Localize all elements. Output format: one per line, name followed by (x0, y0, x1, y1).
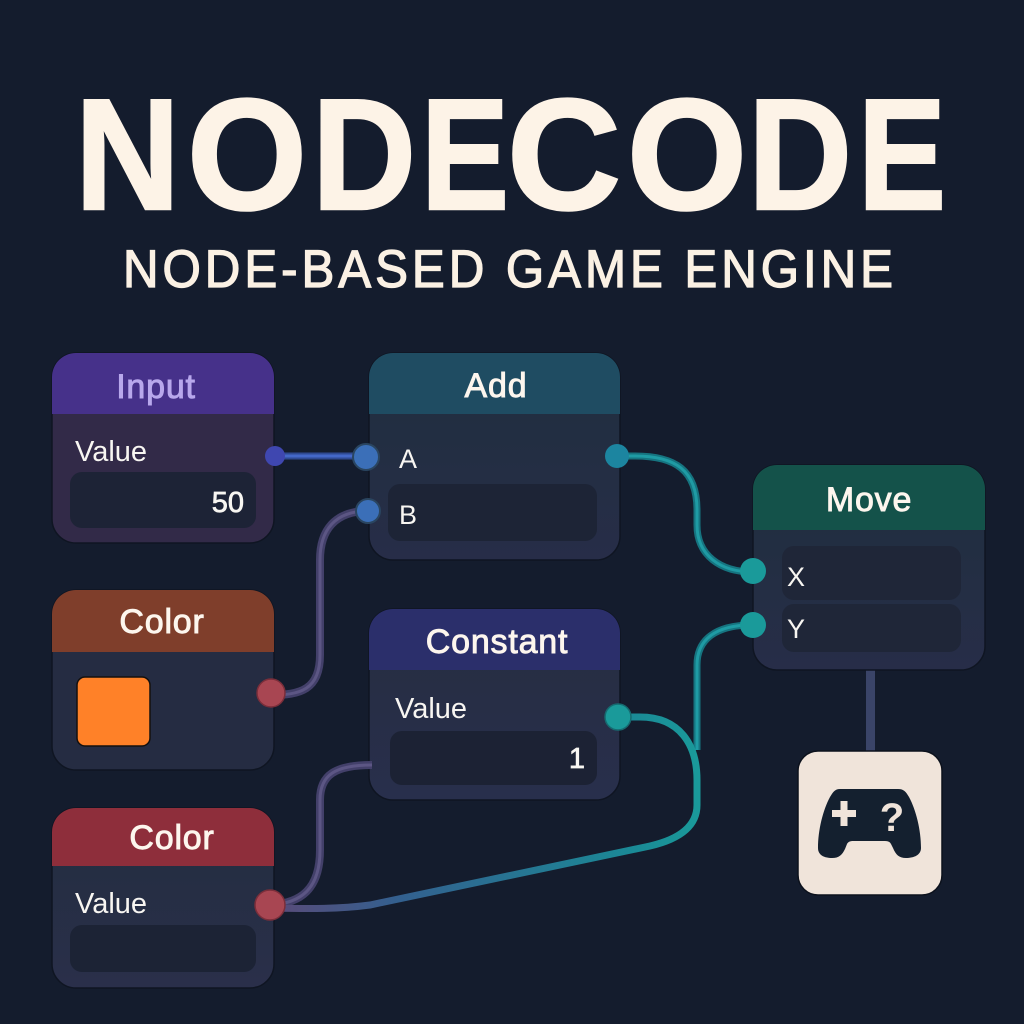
title: O (627, 67, 747, 243)
wire: move to game icon (866, 668, 875, 753)
node: Color swatch: Color (119, 603, 205, 641)
wire: color value to constant (271, 765, 372, 905)
title: E (421, 67, 509, 243)
wire: input to add A (275, 452, 366, 460)
wire: constant and color value loop (271, 717, 697, 909)
node: Color value: Color (129, 819, 215, 857)
icon: game controller tile: ? (880, 796, 904, 840)
port: constant output (605, 704, 631, 730)
subtitle: NODE-BASED GAME ENGINE (123, 239, 893, 298)
node: Constant: Constant (426, 623, 568, 661)
node: Color swatch (52, 590, 274, 770)
wire: color swatch to add B (271, 511, 368, 695)
node: Input: Value (75, 436, 147, 468)
node: Color value (52, 808, 274, 988)
node: Input (52, 353, 274, 543)
icon: game controller tile (798, 751, 942, 895)
node: Add: Add (465, 367, 527, 405)
node: Constant: Value (395, 693, 467, 725)
port: add A (353, 444, 379, 470)
port: color value output (255, 890, 285, 920)
port: input output (265, 446, 285, 466)
title: N (75, 67, 180, 243)
port: move X (740, 558, 766, 584)
title: E (858, 67, 946, 243)
node: Move: Move (826, 481, 912, 519)
title: D (748, 67, 852, 243)
port: add output (605, 444, 629, 468)
node: Add: A (399, 444, 417, 474)
node: Move (753, 465, 985, 670)
port: add B (356, 499, 380, 523)
wire: constant to move Y (697, 625, 752, 750)
node: Input: Input (116, 368, 196, 406)
node: Move: Y (787, 614, 805, 644)
title: C (507, 67, 621, 243)
title: D (312, 67, 416, 243)
wire: add output to move X (618, 456, 753, 572)
node: Add (369, 353, 620, 560)
node: Constant: 1 (569, 743, 585, 775)
node: Move: X (787, 562, 805, 592)
node: Constant (369, 609, 620, 800)
node: Add: B (399, 500, 417, 530)
node: Color value: Value (75, 888, 147, 920)
node: Input: 50 (212, 487, 244, 519)
port: color swatch output (257, 679, 285, 707)
title: O (187, 67, 307, 243)
port: move Y (740, 612, 766, 638)
